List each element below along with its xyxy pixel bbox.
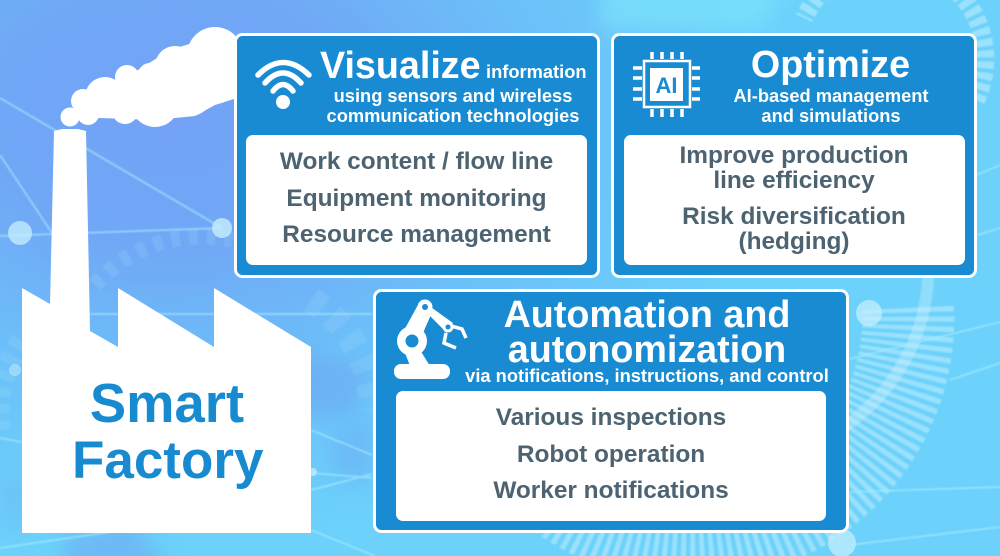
factory illustration (22, 27, 311, 533)
subheading: communication technologies (327, 105, 579, 126)
subheading: using sensors and wireless (334, 85, 572, 106)
list box: Resource management (282, 221, 551, 248)
title: Smart Factory (72, 373, 264, 490)
panel: optimize (612, 34, 976, 276)
smoke cloud (60, 27, 243, 127)
heading: Visualize: information (486, 61, 587, 82)
list box: Equipment monitoring (286, 185, 547, 212)
subheading: and simulations (761, 105, 901, 126)
heading: Optimize: Optimize (751, 43, 910, 85)
title: Smart Factory: Smart (90, 373, 244, 434)
panel frame (236, 34, 598, 276)
subheading (733, 85, 929, 126)
icon: robot arm (394, 300, 466, 379)
list box: (hedging) (738, 228, 850, 255)
factory silhouette (22, 129, 311, 533)
subheading: AI-based management (733, 85, 929, 106)
heading: Automation and autonomization: autonomization (508, 328, 786, 370)
list box (624, 135, 965, 265)
list box: Risk diversification (682, 203, 906, 230)
list box (396, 391, 826, 521)
list box: line efficiency (713, 167, 875, 194)
list box: Improve production (679, 142, 909, 169)
list box: Work content / flow line (280, 148, 553, 175)
panel: automation (374, 290, 848, 532)
panel: visualize (236, 34, 598, 276)
list box (246, 135, 587, 265)
list box: Various inspections (496, 404, 726, 431)
list box: Worker notifications (493, 477, 729, 504)
title: Smart Factory: Factory (72, 431, 264, 490)
icon: wifi (258, 62, 309, 109)
subheading (327, 85, 579, 126)
panel frame (612, 34, 976, 276)
heading: Automation and autonomization (504, 293, 790, 370)
list box: Robot operation (517, 441, 705, 468)
subheading: via notifications, instructions, and control (465, 365, 829, 386)
heading: Visualize: Visualize (320, 44, 481, 86)
icon: AI chip (633, 52, 700, 117)
heading: Automation and autonomization: Automation and (504, 293, 790, 335)
panel frame (374, 290, 848, 532)
heading: Visualize (320, 44, 587, 86)
icon: AI chip: AI (656, 73, 678, 98)
